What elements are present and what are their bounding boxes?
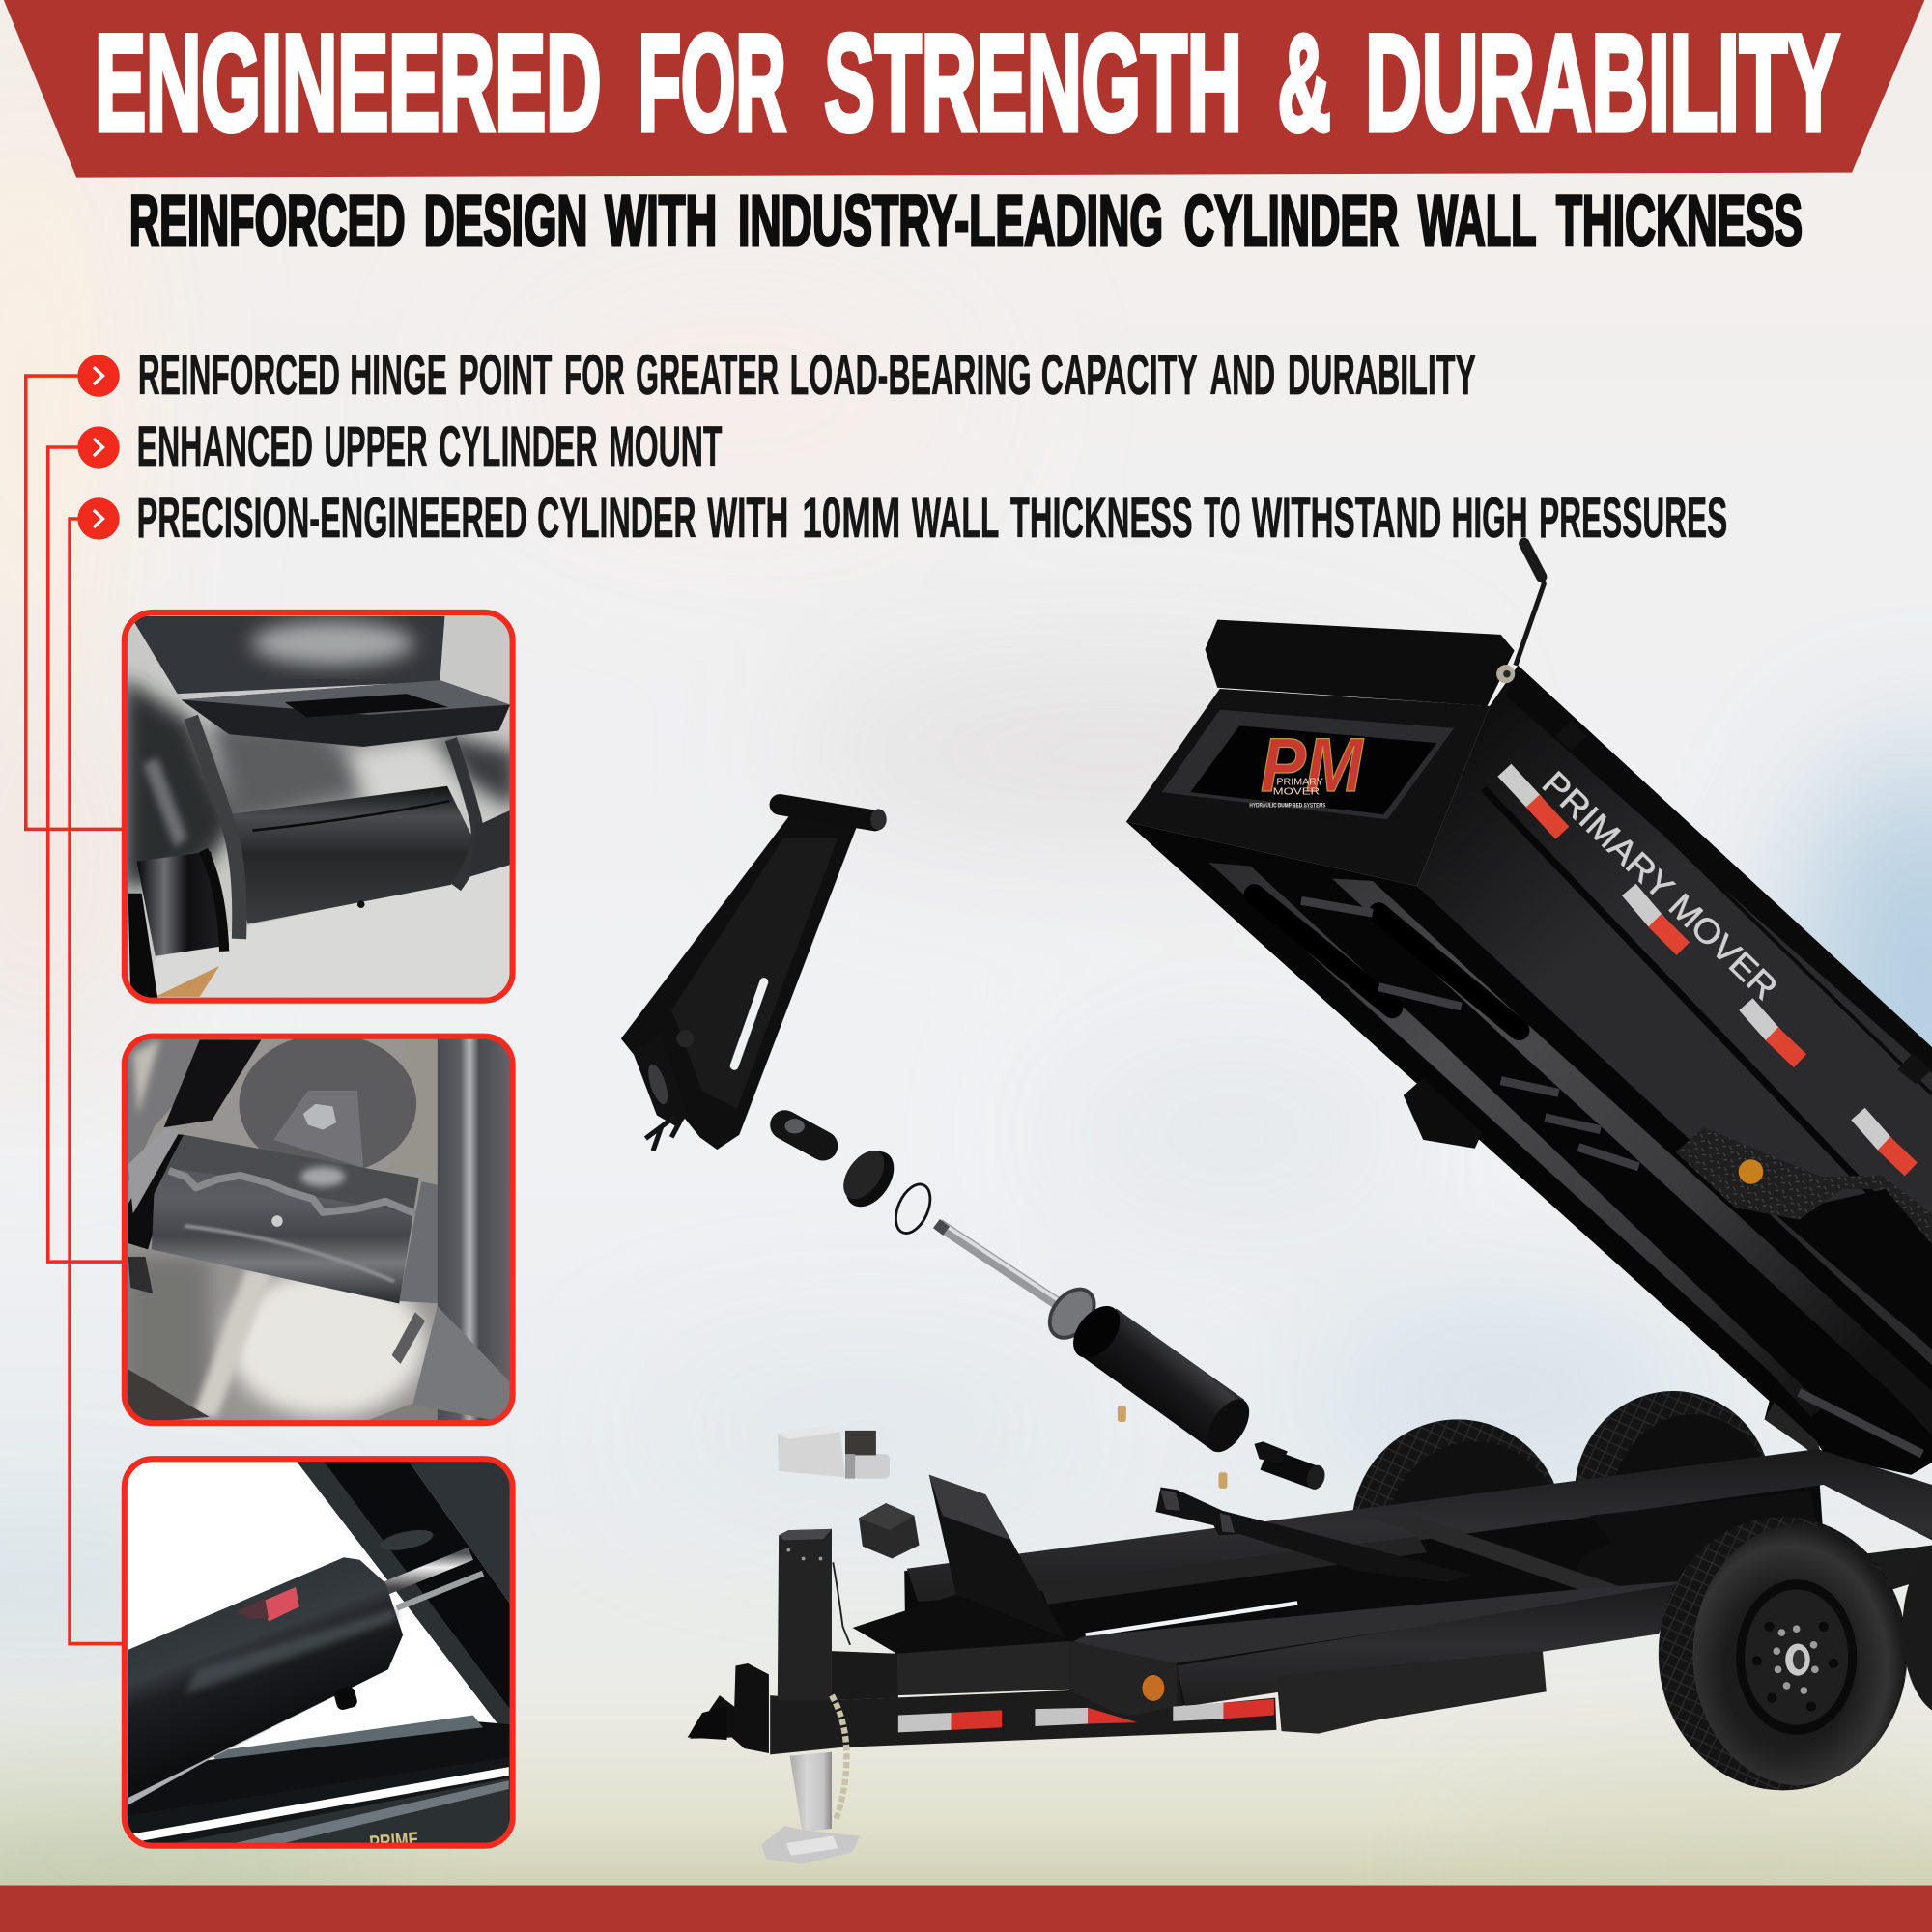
lid handle bbox=[1496, 543, 1544, 683]
bullet text 3: WALL bbox=[912, 487, 999, 550]
bullet text 2: CYLINDER bbox=[439, 415, 598, 478]
piston rod bbox=[936, 1224, 1103, 1347]
bullet text 3: THICKNESS bbox=[1010, 487, 1193, 550]
bed underside frame bbox=[1126, 822, 1932, 1475]
battery box bbox=[859, 1503, 920, 1559]
bullet text 1 bbox=[138, 344, 1476, 407]
frame gusset bbox=[1764, 1403, 1820, 1451]
bullet icon 3 bbox=[77, 497, 120, 540]
bullet text 1: AND bbox=[1210, 344, 1275, 407]
upper cylinder mount bracket bbox=[621, 805, 887, 1151]
brand text on side panel: PRIMARY MOVER bbox=[1535, 764, 1785, 1008]
photo panel: precision-engineered cylinder: PRIME bbox=[368, 1827, 419, 1855]
tongue beam bbox=[770, 1658, 1276, 1754]
bullet text 3: WITH bbox=[707, 487, 788, 550]
bullet text 1: GREATER bbox=[636, 344, 779, 407]
bullet text 2: UPPER bbox=[324, 415, 428, 478]
exploded cylinder parts bbox=[621, 805, 1327, 1492]
bullet text 3: PRESSURES bbox=[1539, 487, 1727, 550]
title: FOR bbox=[639, 8, 786, 160]
safety chain bbox=[832, 1695, 846, 1821]
bullet icon 1 bbox=[77, 355, 120, 397]
diamond-plate fender bbox=[1676, 1127, 1932, 1244]
bullet text 2: MOUNT bbox=[609, 415, 723, 478]
title: ENGINEERED bbox=[95, 8, 601, 160]
second front wheel bbox=[1902, 1543, 1932, 1716]
subtitle: CYLINDER bbox=[1184, 181, 1399, 261]
lower cylinder cap bbox=[1254, 1441, 1327, 1492]
subtitle: WITH bbox=[605, 181, 717, 261]
cross member bbox=[1368, 1515, 1622, 1593]
dump bed bbox=[1126, 543, 1932, 1475]
bullet text 1: LOAD-BEARING bbox=[790, 344, 1032, 407]
logo: HYDRAULIC DUMP BED SYSTEMS bbox=[1249, 802, 1325, 809]
hydraulic pump bbox=[778, 1426, 890, 1479]
photo panel: precision-engineered cylinder bbox=[124, 1458, 518, 1861]
front lid bbox=[1205, 620, 1515, 706]
tape shadow line bbox=[1484, 788, 1932, 1257]
rear wheels bbox=[1351, 1391, 1775, 1636]
side box bbox=[1276, 1651, 1547, 1734]
amber light bbox=[1142, 1675, 1164, 1701]
reflective tape strips bbox=[1504, 770, 1911, 1169]
near rail bbox=[1073, 1580, 1685, 1707]
jack post bbox=[761, 1529, 860, 1864]
o-ring bbox=[889, 1179, 937, 1238]
brass fitting 1 bbox=[1118, 1406, 1126, 1422]
hinge arm bbox=[1155, 1488, 1472, 1582]
trailer chassis bbox=[688, 1391, 1932, 1864]
bullet text 3: PRECISION-ENGINEERED bbox=[137, 487, 527, 550]
bottom bar bbox=[0, 1886, 1932, 1932]
subtitle: REINFORCED bbox=[129, 181, 406, 261]
suspension under frame bbox=[1577, 1491, 1824, 1602]
top rail bbox=[1506, 666, 1932, 1073]
title: & bbox=[1278, 8, 1331, 160]
front triangular plate bbox=[929, 1475, 1065, 1638]
brass fitting 2 bbox=[1218, 1472, 1227, 1489]
connector lines bbox=[26, 376, 125, 1644]
coupler and hitch bbox=[688, 1663, 769, 1753]
photo panel: reinforced hinge point bbox=[124, 610, 518, 1005]
subtitle: WALL bbox=[1418, 181, 1537, 261]
feature list bbox=[77, 344, 1727, 550]
bullet text 3: WITHSTAND bbox=[1252, 487, 1441, 550]
tongue reflectors bbox=[898, 1699, 1274, 1732]
bullet text 2 bbox=[137, 415, 723, 478]
chassis interior bbox=[904, 1452, 1824, 1688]
subtitle: DESIGN bbox=[424, 181, 587, 261]
cylinder barrel bbox=[1064, 1297, 1258, 1460]
center rail bbox=[1040, 1537, 1427, 1605]
bullet text 3: TO bbox=[1204, 487, 1240, 550]
bullet text 3: CYLINDER bbox=[537, 487, 696, 550]
title bbox=[95, 8, 1839, 160]
underside bracket bbox=[1403, 1084, 1479, 1149]
bullet text 3: 10MM bbox=[802, 487, 900, 550]
front wheel bbox=[1659, 1517, 1907, 1790]
fender shadow area bbox=[1775, 1189, 1932, 1350]
bullet text 1: POINT bbox=[458, 344, 553, 407]
photo panel: enhanced upper cylinder mount bbox=[124, 1034, 518, 1430]
far rail bbox=[907, 1449, 1932, 1602]
bullet text 3: HIGH bbox=[1452, 487, 1528, 550]
cylinder end fitting bbox=[784, 1119, 823, 1146]
top banner bbox=[4, 0, 1924, 178]
bullet text 1: DURABILITY bbox=[1288, 344, 1476, 407]
subtitle: INDUSTRY-LEADING bbox=[738, 181, 1163, 261]
bullet icon 2 bbox=[77, 426, 120, 469]
bullet text 1: REINFORCED bbox=[138, 344, 340, 407]
bullet text 1: CAPACITY bbox=[1041, 344, 1198, 407]
logo: PM bbox=[1261, 722, 1365, 808]
bullet text 2: ENHANCED bbox=[137, 415, 313, 478]
tongue box bbox=[853, 1595, 1073, 1694]
subtitle bbox=[129, 181, 1803, 261]
bullet text 3 bbox=[137, 487, 1727, 550]
title: STRENGTH bbox=[824, 8, 1242, 160]
gland seal disc bbox=[833, 1141, 904, 1215]
logo: PRIMARY bbox=[1276, 777, 1323, 787]
stake pockets bbox=[1555, 721, 1932, 1084]
bed side panel bbox=[1417, 666, 1932, 1365]
bullet text 1: FOR bbox=[564, 344, 625, 407]
bullet text 1: HINGE bbox=[350, 344, 447, 407]
recessed logo frame bbox=[1162, 710, 1454, 819]
logo: MOVER bbox=[1273, 787, 1320, 798]
